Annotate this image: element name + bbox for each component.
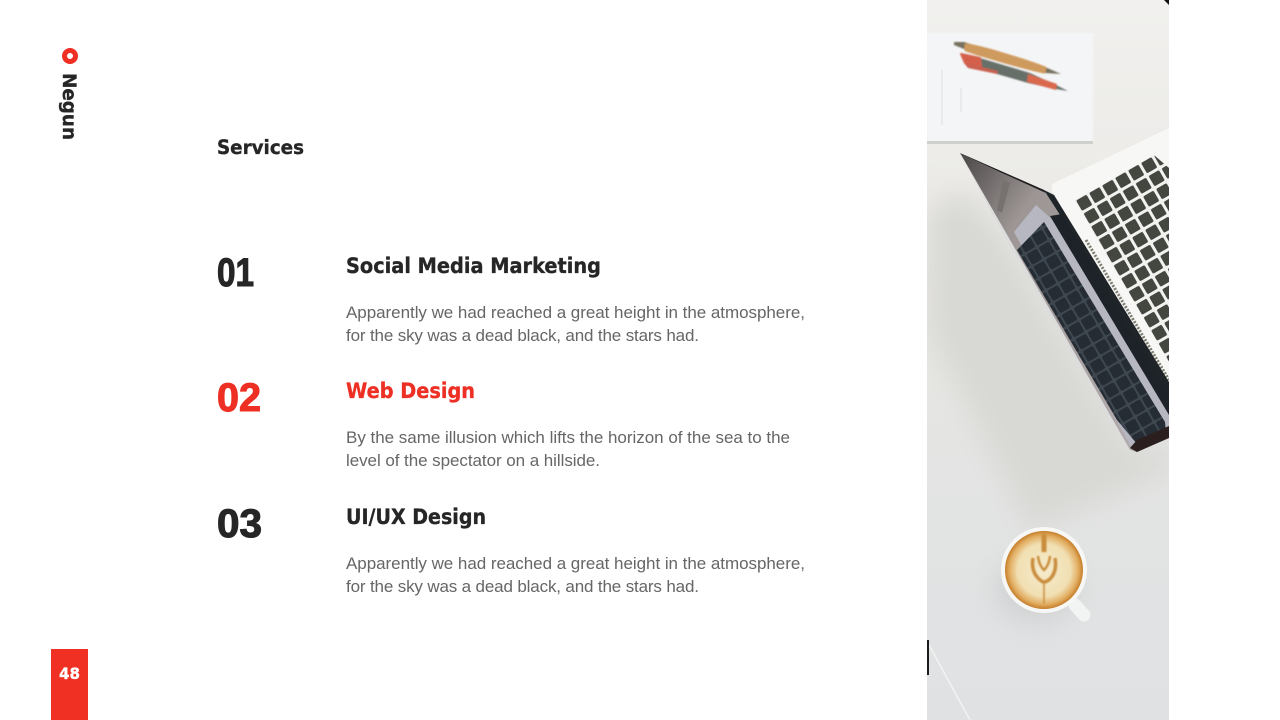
icon: brand dot (64, 50, 76, 62)
heading: Services (217, 136, 304, 159)
black corner details (927, 0, 1169, 675)
wooden pen (954, 42, 1061, 74)
laptop hinge (1044, 190, 1169, 412)
page number badge (51, 649, 88, 720)
number 02: 02 (217, 376, 261, 420)
photo: desk with laptop, notebook, pens and coffee (927, 0, 1169, 720)
description: Apparently we had reached a great height in the atmosphere, (346, 554, 805, 573)
laptop base (1052, 128, 1169, 385)
description: for the sky was a dead black, and the stars had. (346, 577, 699, 596)
red pen (961, 54, 1068, 91)
number 01: 01 (217, 251, 254, 295)
service item 02 (217, 376, 790, 470)
page number: 48 (59, 664, 80, 683)
laptop shadow (927, 190, 1169, 530)
reflected keyboard (1017, 222, 1166, 444)
title: web design: Web Design (346, 379, 475, 403)
service item 03 (217, 502, 805, 596)
title: ui/ux design: UI/UX Design (346, 505, 486, 529)
title: social media marketing: Social Media Marketing (346, 254, 601, 278)
pens (954, 42, 1068, 91)
speaker strip (1086, 240, 1169, 380)
description: for the sky was a dead black, and the stars had. (346, 326, 699, 345)
description: By the same illusion which lifts the horizon of the sea to the (346, 428, 790, 447)
brand logo (58, 50, 80, 140)
number 03: 03 (217, 502, 262, 546)
cup handle (1075, 605, 1084, 615)
brand name: Negun (58, 73, 80, 140)
coffee cup (996, 527, 1087, 622)
notebook (927, 33, 1093, 144)
description: Apparently we had reached a great height in the atmosphere, (346, 303, 805, 322)
laptop lid (960, 153, 1169, 452)
description: level of the spectator on a hillside. (346, 451, 600, 470)
service item 01 (217, 251, 805, 345)
keyboard (1074, 155, 1169, 362)
table edge (929, 645, 970, 720)
